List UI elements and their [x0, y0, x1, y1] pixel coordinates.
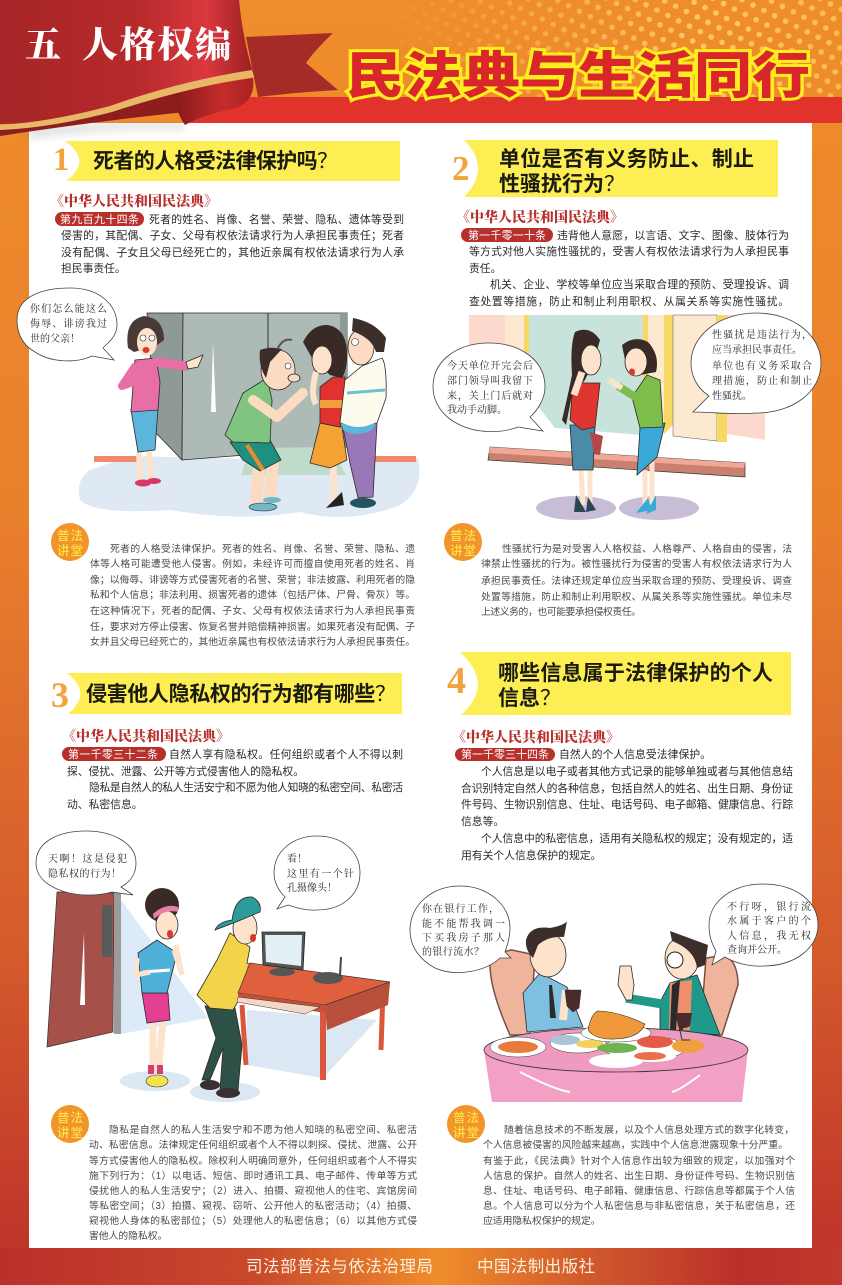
question 1 heading banner: [53, 141, 400, 181]
speech bubble left: 的银行流水？: [422, 945, 484, 958]
explanation: question 3: [51, 1105, 417, 1242]
explanation: question 4: [447, 1105, 795, 1227]
explanation: question 2: 承担民事责任。法律还规定单位应当采取合理的预防、受理投诉、调查: [481, 574, 792, 587]
explanation: question 1: 女并且父母已经死亡的，其他近亲属也有权依法请求行为人承担民事责任。: [90, 635, 415, 648]
explanation: question 4: 讲堂: [453, 1126, 479, 1140]
figure: man in white shirt: [340, 318, 386, 508]
explanation: question 2: [444, 523, 792, 618]
speech bubble left: [410, 886, 511, 973]
question 4 heading banner: 4: [447, 660, 466, 702]
speech bubble left: [433, 343, 545, 432]
article text: 查处置等措施，防止和制止利用职权、从属关系等实施性骚扰。: [469, 294, 789, 308]
explanation: question 3: 窥视他人身体的私密部位；（5）处理他人的私密信息；（6）以其他方式侵: [89, 1214, 417, 1227]
question 2 heading banner: [452, 140, 778, 197]
explanation: question 1: 私和个人信息；非法利用、损害死者的遗体（包括尸体、尸骨、骨灰）等。: [90, 588, 415, 601]
figure: woman with headband: [136, 888, 182, 1087]
speech bubble: 世的父亲！: [30, 332, 80, 345]
question 2 heading banner: 单位是否有义务防止、制止: [499, 147, 754, 171]
law title: 《中华人民共和国民法典》: [452, 729, 620, 746]
question 2 heading banner: 性骚扰行为？: [499, 173, 625, 196]
question 4 heading banner: [447, 652, 791, 715]
explanation: question 2: 性骚扰行为是对受害人人格权益、人格尊严、人格自由的侵害，法: [502, 542, 792, 555]
speech bubble right: 查询并公开。: [727, 943, 787, 956]
figure: man in yellow jacket: [197, 897, 303, 1098]
article tag: 第九百九十四条: [60, 212, 139, 226]
explanation: question 3: 害他人的隐私权。: [89, 1229, 167, 1242]
speech bubble left: 今天单位开完会后: [447, 359, 533, 372]
article text: 等方式对他人实施性骚扰的，受害人有权依法请求行为人承担民事: [469, 244, 789, 258]
question 3 heading banner: 侵害他人隐私权的行为都有哪些？: [86, 683, 396, 706]
speech bubble right: 孔摄像头！: [287, 881, 337, 894]
explanation: question 1: 普法: [57, 528, 83, 543]
question 4 heading banner: 哪些信息属于法律保护的个人: [498, 661, 773, 685]
speech bubble: 侮辱、诽谤我过: [30, 317, 107, 330]
article text: 自然人享有隐私权。任何组织或者个人不得以刺: [169, 747, 403, 761]
explanation: question 1: 在这种情况下，死者的配偶、子女、父母有权依法请求行为人承担民事责: [90, 604, 415, 617]
explanation: question 2: 处置等措施，防止和制止利用职权、从属关系等实施性骚扰。单位未尽: [481, 590, 792, 603]
question 4 heading banner: 信息？: [498, 686, 561, 710]
header halftone dots: [380, 0, 842, 97]
question 3 heading banner: 3: [51, 675, 69, 715]
law title: 《中华人民共和国民法典》: [456, 209, 624, 226]
cartoon: dinner table request: [410, 884, 818, 1102]
panel: question 3: [36, 673, 417, 1242]
footer publisher left: 司法部普法与依法治理局: [246, 1257, 433, 1276]
article text: [469, 228, 789, 308]
explanation: question 3: 等方式侵害他人的隐私权。除权利人明确同意外，任何组织或者个人不得实: [89, 1154, 417, 1167]
figure: man in teal suit: [618, 931, 720, 1035]
figure: woman in red and orange: [303, 325, 347, 508]
article text: 信息等。: [461, 814, 504, 828]
article text: 隐私是自然人的私人生活安宁和不愿为他人知晓的私密空间、私密活: [89, 780, 403, 794]
footer publisher right: 中国法制出版社: [477, 1257, 595, 1276]
figure: man in green vest: [225, 340, 303, 511]
article text: 个人信息中的私密信息，适用有关隐私权的规定；没有规定的，适: [481, 831, 793, 845]
explanation: question 2: 普法: [450, 528, 476, 543]
explanation: question 4: 有鉴于此，《民法典》针对个人信息作出较为细致的规定，以加强对个: [483, 1154, 795, 1167]
speech bubble left: 部门领导叫我留下: [447, 374, 533, 387]
explanation: question 1: 死者的人格受法律保护。死者的姓名、肖像、名誉、荣誉、隐私、遗: [110, 542, 415, 555]
panel: question 1: [17, 141, 420, 648]
speech bubble right: 这里有一个针: [287, 867, 354, 880]
explanation: question 4: 息、住址、电话号码、电子邮箱、健康信息、行踪信息等都属于个人信: [483, 1184, 795, 1197]
explanation: question 2: 上述义务的，也可能要承担侵权责任。: [481, 605, 641, 618]
article text: 个人信息是以电子或者其他方式记录的能够单独或者与其他信息结: [481, 764, 793, 778]
speech bubble right: 理措施，防止和制止: [712, 374, 812, 387]
speech bubble left: 你在银行工作，: [422, 902, 499, 915]
explanation: question 3: 普法: [57, 1110, 83, 1125]
explanation: question 1: 讲堂: [57, 544, 83, 558]
figure: woman in pink: [122, 316, 203, 486]
section label: 五: [25, 25, 61, 65]
speech bubble left: 天啊！这是侵犯: [48, 852, 127, 865]
explanation: question 4: 人信息的保护。自然人的姓名、出生日期、身份证件号码、生物识别信: [483, 1169, 795, 1182]
article text: 合识别特定自然人的各种信息，包括自然人的姓名、出生日期、身份证: [461, 781, 793, 795]
question 2 heading banner: 2: [452, 149, 470, 188]
article tag: 第一千零一十条: [468, 228, 546, 242]
law title: 《中华人民共和国民法典》: [50, 193, 218, 210]
speech bubble right: 应当承担民事责任。: [712, 343, 802, 356]
question 1 heading banner: 1: [53, 142, 70, 178]
explanation: question 2: 讲堂: [450, 544, 476, 558]
explanation: question 3: 施下列行为：（1）以电话、短信、即时通讯工具、电子邮件、传单等方式: [89, 1169, 417, 1182]
article text: 动、私密信息。: [67, 797, 143, 811]
law title: 《中华人民共和国民法典》: [62, 728, 230, 745]
article text: 用有关个人信息保护的规定。: [461, 848, 601, 862]
explanation: question 3: 讲堂: [57, 1126, 83, 1140]
speech bubble right: [274, 836, 360, 910]
explanation: question 1: 体等人格可能遭受他人侵害。例如，未经许可而擅自使用死者的姓名、肖: [90, 557, 415, 570]
speech bubble left: 能不能帮我调一: [422, 917, 505, 930]
panel: question 4: [410, 652, 818, 1227]
article text: 责任。: [469, 262, 501, 275]
article text: 机关、企业、学校等单位应当采取合理的预防、受理投诉、调: [490, 277, 789, 291]
speech bubble right: 人信息，我无权: [727, 929, 811, 942]
article text: 自然人的个人信息受法律保护。: [559, 747, 711, 761]
speech bubble right: 单位也有义务采取合: [712, 359, 812, 372]
article text: 违背他人意愿，以言语、文字、图像、肢体行为: [557, 228, 789, 242]
figure: crying woman: [562, 330, 603, 512]
article text: [461, 747, 793, 862]
explanation: question 4: 息。个人信息可以分为个人私密信息与非私密信息，关于私密信息，还: [483, 1199, 795, 1212]
speech bubble left: 隐私权的行为！: [48, 867, 121, 880]
main title: 民法典与生活同行: [346, 48, 810, 104]
cartoon: neighbours gossiping: [17, 288, 420, 517]
speech bubble left: 来，关上门后就对: [447, 389, 533, 402]
figure: man in blue shirt: [523, 921, 583, 1032]
figure: comforting woman: [609, 339, 665, 514]
speech bubble left: [36, 831, 136, 895]
explanation: question 3: 动、私密信息。法律规定任何组织或者个人不得以刺探、侵扰、泄露、公开: [89, 1138, 417, 1151]
speech bubble left: 下买我房子那人: [422, 931, 505, 944]
question 1 heading banner: 死者的人格受法律保护吗？: [93, 150, 338, 173]
cartoon: hidden camera: [36, 831, 390, 1102]
article text: 侵害的，其配偶、子女、父母有权依法请求行为人承担民事责任；死者: [61, 228, 404, 242]
ribbon banner: [0, 0, 338, 140]
explanation: question 2: 律禁止性骚扰的行为。被性骚扰行为侵害的受害人有权依法请求行为人: [481, 557, 792, 570]
explanation: question 4: 个人信息被侵害的风险越来越高，实践中个人信息泄露现象十分严重。: [483, 1138, 788, 1151]
explanation: question 4: 普法: [453, 1110, 479, 1125]
article text: 死者的姓名、肖像、名誉、荣誉、隐私、遗体等受到: [149, 212, 404, 226]
speech bubble right: [709, 884, 818, 966]
speech bubble: 你们怎么能这么: [30, 302, 107, 315]
explanation: question 1: 像；以侮辱、诽谤等方式侵害死者的名誉、荣誉；非法披露、利用死者的隐: [90, 573, 415, 586]
speech bubble right: 性骚扰是违法行为，: [712, 328, 812, 341]
speech bubble right: 性骚扰。: [712, 389, 752, 402]
explanation: question 4: 随着信息技术的不断发展，以及个人信息处理方式的数字化转变，: [504, 1123, 794, 1136]
cartoon: harassment complaint: [433, 313, 821, 520]
question 3 heading banner: [51, 673, 402, 715]
article text: [61, 212, 404, 275]
article tag: 第一千零三十四条: [461, 747, 549, 761]
article text: [67, 747, 403, 811]
speech bubble right: [691, 313, 821, 414]
header red band: [190, 97, 842, 123]
speech bubble left: 我动手动脚。: [447, 403, 507, 416]
table with dishes: [484, 1011, 748, 1102]
explanation: question 1: [51, 523, 415, 648]
chairs: [490, 950, 738, 1035]
explanation: question 4: 应适用隐私权保护的规定。: [483, 1214, 601, 1227]
desk with computer: [237, 932, 390, 1080]
speech bubble: [17, 288, 117, 361]
article text: 件号码、生物识别信息、住址、电话号码、电子邮箱、健康信息、行踪: [461, 797, 793, 811]
article text: 担民事责任。: [61, 261, 126, 275]
article text: 探、侵扰、泄露、公开等方式侵害他人的隐私权。: [67, 764, 304, 778]
speech bubble right: 看！: [287, 852, 307, 865]
explanation: question 3: 等私密空间；（3）拍摄、窥视、窃听、公开他人的私密活动；（4）拍摄、: [89, 1199, 417, 1212]
article text: 没有配偶、子女且父母已经死亡的，其他近亲属有权依法请求行为人承: [61, 245, 404, 259]
panel: question 2: [433, 140, 821, 618]
explanation: question 1: 任，要求对方停止侵害、恢复名誉并赔偿精神损害。如果死者没有配偶、子: [90, 620, 415, 633]
explanation: question 3: 侵扰他人的私人生活安宁；（2）进入、拍摄、窥视他人的住宅、宾馆房间: [89, 1184, 417, 1197]
speech bubble right: 不行呀，银行流: [727, 900, 811, 913]
speech bubble right: 水属于客户的个: [727, 914, 811, 927]
article tag: 第一千零三十二条: [68, 747, 158, 761]
section name: 人格权编: [82, 25, 231, 65]
explanation: question 3: 隐私是自然人的私人生活安宁和不愿为他人知晓的私密空间、私密活: [109, 1123, 417, 1136]
